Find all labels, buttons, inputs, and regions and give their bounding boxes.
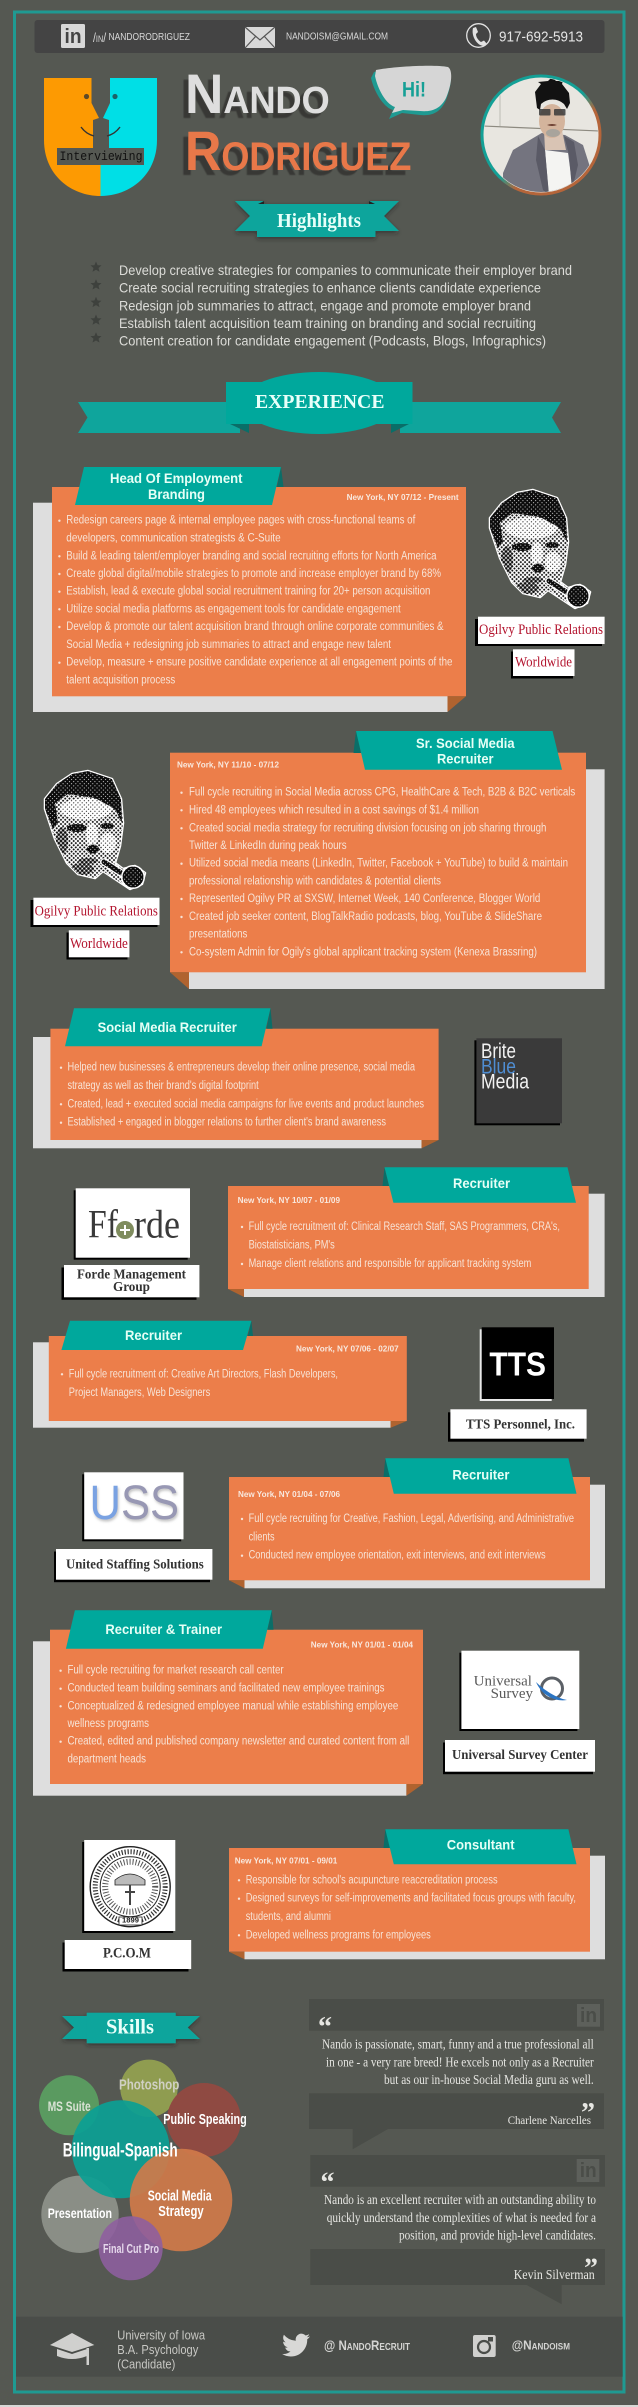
- bullet list: [241, 1221, 560, 1270]
- label: United Staffing Solutions: [54, 1549, 212, 1582]
- bullet list: department heads: [68, 1753, 146, 1765]
- logo: TTS: TTS: [489, 1346, 546, 1382]
- opening quote: “: [320, 2168, 334, 2198]
- job title tab: [384, 1829, 576, 1864]
- linkedin handle: /in/ NANDORODRIGUEZ: [93, 30, 190, 44]
- bubble: Presentation: [41, 2176, 119, 2253]
- bullet list: [59, 1665, 409, 1765]
- bullet list: students, and alumni: [246, 1911, 331, 1923]
- bullet list: talent acquisition process: [66, 675, 176, 687]
- panel: Recruiter & Trainer: [33, 1610, 423, 1796]
- banner: Experience: EXPERIENCE: [255, 391, 384, 413]
- bullet list: [60, 1062, 424, 1129]
- panel: Recruiter, USS: [229, 1458, 605, 1588]
- bullet list: Hired 48 employees which resulted in a cost savings of $1.4 million: [189, 804, 479, 816]
- job title tab: [75, 467, 284, 505]
- label: Universal Survey Center: [443, 1740, 595, 1774]
- date: New York, NY 11/10 - 07/12: [177, 760, 279, 770]
- bullet list: Conducted new employee orientation, exit interviews, and exit interviews: [249, 1550, 546, 1562]
- highlights list: Develop creative strategies for companies to communicate their employer brand: [119, 262, 572, 278]
- bullet list: Full cycle recruitment of: Creative Art Directors, Flash Developers,: [69, 1368, 338, 1380]
- logo: Universal Survey: Universal: [474, 1674, 532, 1690]
- job title tab: Recruiter: [453, 1175, 511, 1191]
- bullet list: developers, communication strategists & C-Suite: [66, 533, 281, 545]
- skill labels: Public Speaking: [163, 2111, 247, 2128]
- skill labels: Final Cut Pro: [103, 2241, 159, 2256]
- icon: twitter: [282, 2334, 310, 2356]
- footer bar: [16, 2317, 623, 2377]
- panel: Head of Employment Branding: [33, 467, 466, 712]
- bullet list: Full cycle recruiting in Social Media across CPG, HealthCare & Tech, B2B & B2C verticals: [189, 787, 576, 799]
- label: Ogilvy Public Relations: [475, 617, 605, 646]
- bubble: Final Cut Pro: [99, 2216, 163, 2280]
- icon: linkedin: in: [64, 26, 82, 48]
- logo: PCOM seal: [82, 1840, 175, 1933]
- education text: B.A. Psychology: [117, 2342, 199, 2357]
- bubble: Bilingual-Spanish: [72, 2100, 170, 2198]
- testimonial: Kevin Silverman: [310, 2155, 605, 2304]
- date: New York, NY 07/06 - 02/07: [296, 1343, 399, 1353]
- speech bubble: Hi: [371, 66, 451, 119]
- bullet list: Full cycle recruiting for market research call center: [68, 1665, 284, 1677]
- highlights list: Redesign job summaries to attract, engage and promote employer brand: [119, 297, 531, 313]
- attribution box: ”: [581, 2098, 595, 2129]
- panel: Consultant: [229, 1829, 605, 1959]
- bullet list: [180, 787, 576, 958]
- job title tab: Recruiter: [437, 751, 494, 767]
- label: Ogilvy Public Relations 2: Ogilvy Public Relations: [35, 904, 158, 920]
- highlights list: Establish talent acquisition team training on branding and social recruiting: [119, 315, 536, 331]
- logo: Universal Survey: Survey: [491, 1686, 533, 1702]
- bullet list: strategy as well as their brand's digital footprint: [68, 1080, 259, 1092]
- logo: Brite Blue Media: [474, 1038, 562, 1125]
- icons: stars: [90, 262, 102, 342]
- date: New York, NY 01/01 - 01/04: [311, 1640, 413, 1650]
- bullet list: Helped new businesses & entrepreneurs develop their online presence, social media: [68, 1062, 415, 1074]
- skill labels: Bilingual-Spanish: [63, 2140, 178, 2162]
- logo: Fforde: [74, 1188, 190, 1260]
- label: United Staffing Solutions: United Staffing Solutions: [66, 1558, 204, 1572]
- date: New York, NY 07/12 - Present: [347, 492, 459, 502]
- label: Forde Management Group: Forde Management: [77, 1268, 186, 1282]
- label: Forde Management Group: Group: [113, 1280, 150, 1295]
- label: TTS Personnel: [448, 1409, 587, 1442]
- highlights list: [90, 262, 572, 349]
- job title tab: Head Of Employment: [110, 470, 243, 486]
- bubble: Public Speaking: [167, 2083, 241, 2157]
- panel: Social Media Recruiter: [33, 1008, 439, 1148]
- chart: skills bubbles: [39, 2060, 247, 2280]
- date: New York, NY 01/04 - 07/06: [238, 1489, 340, 1499]
- bullet list: Create global digital/mobile strategies to promote and increase employer brand by 68%: [66, 568, 441, 580]
- label: TTS Personnel: TTS Personnel, Inc.: [466, 1418, 575, 1432]
- label: Worldwide: Worldwide: [515, 654, 572, 670]
- bullet list: Created job seeker content, BlogTalkRadio podcasts, blog, YouTube & SlideShare: [189, 911, 542, 923]
- job title tab: Recruiter: [452, 1466, 510, 1482]
- bullet list: Co-system Admin for Ogily's global applicant tracking system (Kenexa Brassring): [189, 946, 537, 958]
- bubble: Photoshop: [120, 2060, 178, 2117]
- icon: linkedin: in: [580, 2005, 597, 2027]
- bullet list: Represented Ogilvy PR at SXSW, Internet Week, 140 Conference, Blogger World: [189, 893, 540, 905]
- bullet list: wellness programs: [67, 1718, 149, 1730]
- bubble: MS Suite: [39, 2075, 99, 2135]
- icon: instagram: [473, 2335, 496, 2357]
- job title tab: Consultant: [447, 1836, 515, 1852]
- bullet list: Responsible for school's acupuncture reaccreditation process: [246, 1874, 498, 1886]
- logo: Ogilvy head 1: [487, 488, 595, 612]
- opening quote: “: [318, 2012, 332, 2043]
- job title tab: Recruiter & Trainer: [105, 1621, 222, 1637]
- title: name: RODRIGUEZ: [185, 121, 411, 183]
- banner: Skills: [62, 2013, 200, 2043]
- logo: PCOM seal: 1899: [122, 1918, 139, 1924]
- logo: Brite Blue Media: Brite: [481, 1040, 516, 1063]
- panel: Sr. Social Media Recruiter: [170, 731, 605, 989]
- bullet list: Project Managers, Web Designers: [69, 1387, 211, 1399]
- education text: [117, 2328, 206, 2372]
- date: New York, NY 07/01 - 09/01: [235, 1855, 338, 1865]
- bullet list: Develop, measure + ensure positive candidate experience at all engagement points of the: [66, 657, 452, 669]
- label: Worldwide 2: Worldwide: [70, 936, 128, 952]
- quote text: position, and provide high-level candidates.: [399, 2228, 596, 2242]
- highlights list: Create social recruiting strategies to enhance clients candidate experience: [119, 280, 541, 296]
- label: Universal Survey Center: Universal Survey Center: [452, 1748, 588, 1763]
- icon: linkedin: [61, 24, 85, 48]
- label: Worldwide: [511, 649, 574, 678]
- icon: envelope: [245, 27, 275, 48]
- logo: TTS: [480, 1327, 554, 1401]
- header contact bar: [34, 20, 604, 53]
- bullet list: Develop & promote our talent acquisition brand through online corporate communities &: [66, 621, 444, 633]
- bullet list: Build & leading talent/employer branding and social recruiting efforts for North America: [66, 550, 437, 562]
- logo: Brite Blue Media: Media: [481, 1070, 529, 1094]
- attribution box: [309, 2093, 604, 2149]
- label: Worldwide 2: [66, 930, 129, 960]
- instagram handle: @Nandoism: [512, 2338, 570, 2352]
- testimonial: Charlene Narcelles: [309, 1999, 604, 2149]
- logo: Universal Survey: [459, 1651, 579, 1731]
- attribution box: [310, 2249, 605, 2304]
- bullet list: [61, 1368, 338, 1399]
- job title tab: Branding: [148, 486, 205, 502]
- job title tab: Social Media Recruiter: [98, 1019, 237, 1035]
- banner: Highlights: Highlights: [277, 210, 361, 232]
- logo: Fforde: rde: [134, 1202, 180, 1246]
- job title tab: Sr. Social Media: [416, 735, 515, 751]
- logo: Ogilvy head 2: [42, 769, 150, 893]
- icon: interviewing logo: [44, 78, 157, 196]
- job title tab: [382, 1167, 576, 1203]
- bullet list: Establish, lead & execute global social recruitment training for 20+ person acquisition: [66, 586, 430, 598]
- education text: (Candidate): [117, 2356, 175, 2372]
- bullet list: Redesign careers page & internal employee pages with cross-functional teams of: [66, 515, 416, 527]
- attribution box: ”: [584, 2254, 598, 2284]
- bullet list: Created, lead + executed social media campaigns for live events and product launches: [68, 1098, 424, 1110]
- job title tab: Recruiter: [125, 1327, 183, 1343]
- quote text: [324, 2192, 596, 2242]
- bullet list: clients: [249, 1531, 275, 1543]
- label: Ogilvy Public Relations: Ogilvy Public Relations: [479, 622, 603, 638]
- twitter handle: @ NandoRecruit: [324, 2337, 410, 2353]
- attribution box: Charlene Narcelles: [508, 2113, 591, 2127]
- bullet list: Twitter & LinkedIn during peak hours: [189, 840, 347, 852]
- bullet list: [241, 1513, 574, 1562]
- title: name: [185, 63, 411, 183]
- bullet list: presentations: [189, 929, 248, 941]
- banner: Experience: [78, 372, 561, 434]
- portrait photo: [482, 75, 602, 197]
- bullet list: Developed wellness programs for employees: [246, 1929, 431, 1941]
- bullet list: Social Media + redesigning job summaries to attract and engage new talent: [66, 639, 392, 651]
- skill labels: Photoshop: [119, 2076, 179, 2094]
- label: Forde Management Group: [62, 1265, 199, 1300]
- bullet list: Full cycle recruitment of: Clinical Research Staff, SAS Programmers, CRA's,: [249, 1221, 560, 1233]
- bullet list: Utilized social media means (LinkedIn, Twitter, Facebook + YouTube) to build & maintain: [189, 858, 568, 870]
- label: P.C.O.M: [62, 1940, 191, 1972]
- job title tab: [65, 1008, 272, 1046]
- quote text: but as our in-house Social Media guru as well.: [384, 2072, 594, 2087]
- job title tab: [61, 1321, 253, 1350]
- icon: linkedin: in: [580, 2160, 597, 2182]
- logo: Brite Blue Media: Blue: [481, 1056, 516, 1078]
- bullet list: Created social media strategy for recruiting division focusing on job sharing through: [189, 822, 546, 834]
- job title tab: [384, 1458, 576, 1494]
- bullet list: professional relationship with candidates & potential clients: [189, 875, 441, 887]
- skill labels: Strategy: [158, 2203, 204, 2220]
- panel: Recruiter, Forde: [228, 1167, 605, 1297]
- education text: University of Iowa: [117, 2328, 206, 2342]
- label: P.C.O.M: P.C.O.M: [103, 1945, 151, 1961]
- banner: Highlights: [235, 201, 399, 237]
- bullet list: Conceptualized & redesigned employee manual while establishing employee: [68, 1700, 398, 1712]
- email address: NANDOISM@GMAIL.COM: [286, 32, 388, 42]
- label: Ogilvy Public Relations 2: [30, 898, 160, 927]
- highlights list: Content creation for candidate engagement (Podcasts, Blogs, Infographics): [119, 333, 546, 349]
- bullet list: Manage client relations and responsible for applicant tracking system: [249, 1258, 531, 1270]
- bullet list: Utilize social media platforms as engagement tools for candidate engagement: [66, 603, 401, 615]
- quote text: [322, 2036, 594, 2087]
- date: New York, NY 10/07 - 01/09: [238, 1195, 340, 1205]
- bullet list: [58, 515, 452, 687]
- attribution box: Kevin Silverman: [514, 2267, 595, 2282]
- icon: graduation cap: [50, 2333, 94, 2365]
- bullet list: Biostatisticians, PM's: [249, 1240, 335, 1252]
- skill labels: Presentation: [48, 2205, 112, 2221]
- title: name: NANDO: [185, 63, 330, 125]
- skill labels: [48, 2076, 247, 2256]
- bullet list: Conducted team building seminars and facilitated new employee trainings: [68, 1683, 385, 1695]
- banner: Skills: Skills: [106, 2015, 154, 2039]
- job title tab: [354, 731, 562, 770]
- bubble: Social Media Strategy: [130, 2149, 232, 2251]
- logo: USS: USS: [90, 1476, 179, 1530]
- phone number: 917-692-5913: [499, 28, 583, 46]
- skill labels: Social Media: [148, 2188, 212, 2204]
- bullet list: Established + engaged in blogger relations to further client's brand awareness: [68, 1117, 386, 1129]
- bullet list: [238, 1874, 576, 1941]
- panel: Recruiter, TTS: [33, 1321, 407, 1428]
- skill labels: MS Suite: [48, 2098, 91, 2114]
- logo: Fforde: Ff: [88, 1202, 119, 1246]
- icon: interviewing logo: Interviewing: [60, 149, 142, 164]
- job title tab: [66, 1610, 274, 1649]
- icon: phone: [467, 24, 490, 47]
- bullet list: Created, edited and published company newsletter and curated content from all: [68, 1736, 409, 1748]
- speech bubble: Hi: Hi!: [402, 78, 426, 102]
